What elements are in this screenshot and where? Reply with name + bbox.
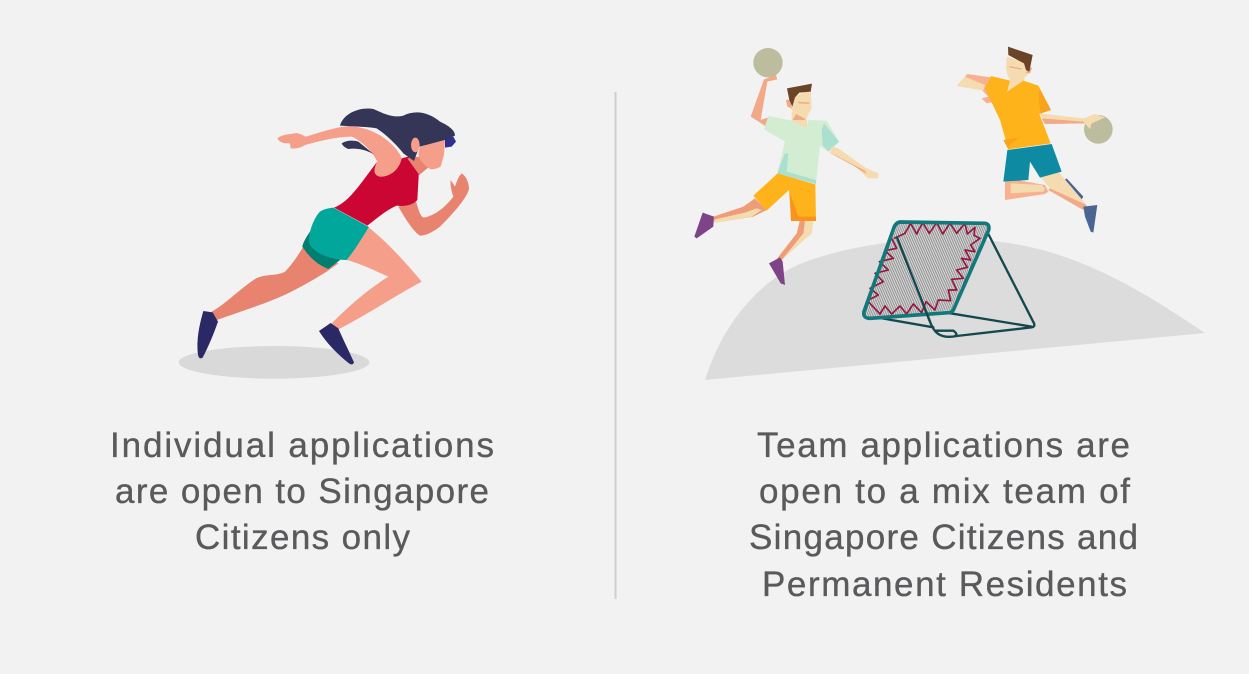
front shoe xyxy=(1083,205,1097,233)
front support bar xyxy=(897,237,930,322)
ear xyxy=(411,138,420,152)
text: team applications: Singapore Citizens and xyxy=(749,518,1138,557)
front shoe xyxy=(319,323,354,364)
illustration: rebound net xyxy=(864,222,1034,337)
back arm xyxy=(398,173,469,236)
shorts shadow xyxy=(302,232,340,269)
t-shirt shadow xyxy=(777,123,839,184)
thigh rear xyxy=(1005,180,1048,200)
shorts xyxy=(309,208,369,260)
head xyxy=(1006,57,1028,80)
hair xyxy=(787,84,812,107)
face lines xyxy=(1009,66,1022,70)
hair xyxy=(1008,47,1033,72)
front lower leg shade xyxy=(777,220,805,260)
vertical divider xyxy=(614,92,616,599)
face line xyxy=(793,102,809,120)
runner ground shadow xyxy=(179,346,369,379)
text: individual applications: Citizens only xyxy=(195,518,410,557)
lower hair strand xyxy=(342,141,374,154)
illustration: jumping player right xyxy=(957,47,1113,233)
text: individual applications xyxy=(110,426,494,557)
shorts xyxy=(1003,144,1062,182)
back shoe xyxy=(197,311,218,358)
neck xyxy=(407,157,429,175)
ball xyxy=(1084,115,1113,144)
shorts shade xyxy=(790,193,816,221)
back arm shade xyxy=(830,153,867,174)
ground shape xyxy=(705,239,1205,380)
ear xyxy=(786,99,792,108)
head xyxy=(790,90,812,117)
purple shoes xyxy=(694,213,785,285)
thigh rear highlight xyxy=(1011,183,1045,193)
net mesh xyxy=(864,223,988,317)
front lower leg xyxy=(777,220,813,260)
crimson zigzag lacing xyxy=(867,223,980,314)
rear support frame xyxy=(877,234,1034,337)
net front frame xyxy=(864,222,989,318)
front leg shade xyxy=(1048,188,1087,210)
left arm highlight xyxy=(957,77,985,91)
illustration: sprinting woman xyxy=(179,109,469,379)
back leg xyxy=(211,247,338,321)
ear xyxy=(1026,65,1032,73)
face xyxy=(418,140,445,169)
neck xyxy=(792,112,807,128)
back arm xyxy=(830,146,878,178)
front leg xyxy=(332,228,422,329)
right arm shade xyxy=(1042,118,1085,124)
text: individual applications: are open to Singapore xyxy=(115,472,489,511)
front leg xyxy=(1040,172,1087,210)
text: team applications: Permanent Residents xyxy=(762,565,1127,604)
shorts xyxy=(753,173,816,221)
ball xyxy=(753,48,783,77)
hair back bun xyxy=(445,137,456,148)
illustration: jumping player left xyxy=(694,48,878,285)
left arm xyxy=(957,74,995,103)
text: team applications xyxy=(749,426,1138,604)
hair xyxy=(340,109,455,161)
upper leg back xyxy=(713,198,767,223)
t-shirt shade xyxy=(1003,88,1051,149)
raised arm xyxy=(751,75,777,127)
torso and front arm skin xyxy=(277,126,402,177)
t-shirt xyxy=(764,116,839,184)
neck xyxy=(1008,72,1025,92)
lower leg back highlight xyxy=(715,208,762,223)
text: team applications: Team applications are xyxy=(757,426,1130,465)
rear shoe xyxy=(1060,178,1083,199)
t-shirt xyxy=(985,76,1051,149)
text: individual applications: Individual applications xyxy=(110,426,494,465)
tank top xyxy=(334,157,419,226)
right arm xyxy=(1040,113,1105,129)
text: team applications: open to a mix team of xyxy=(759,472,1130,511)
